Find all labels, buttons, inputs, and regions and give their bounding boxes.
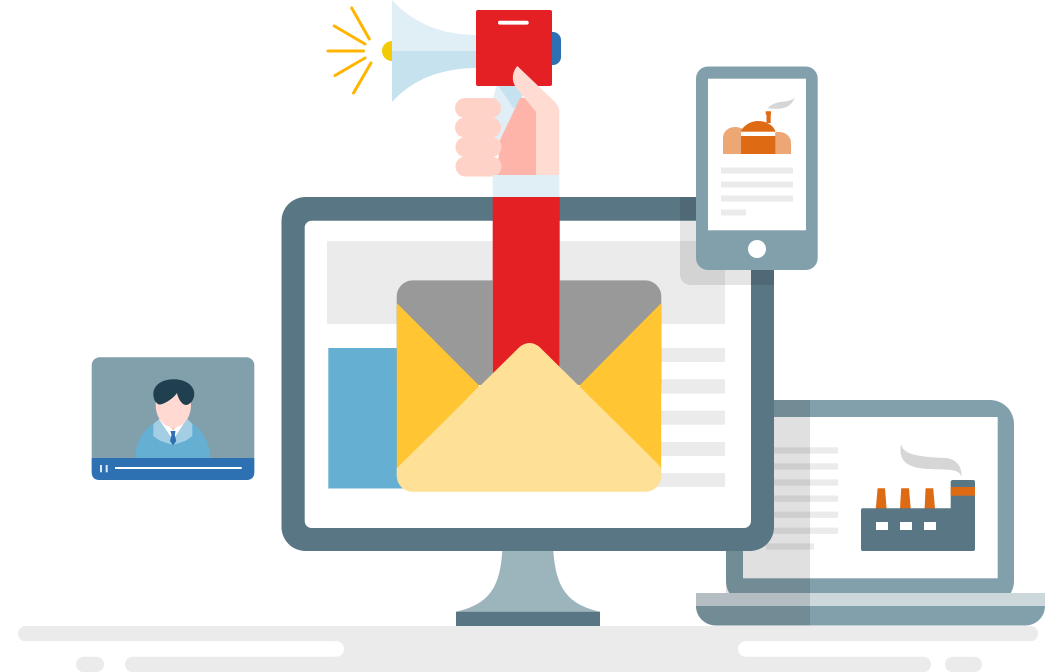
monitor cast shadow on laptop (696, 400, 810, 626)
icon: factory (861, 444, 975, 551)
icon: hand (455, 66, 559, 197)
phone home button (748, 240, 766, 258)
sound rays (328, 8, 371, 93)
ground shadow (0, 626, 1056, 672)
blue image block (328, 348, 408, 488)
megaphone handle (485, 84, 516, 142)
palm (497, 98, 536, 175)
shirt cuff (493, 175, 559, 197)
red arm sleeve (493, 197, 560, 387)
panel: monitor (282, 197, 774, 551)
megaphone bell (392, 0, 478, 51)
envelope side flaps (397, 303, 661, 470)
text lines (650, 348, 725, 487)
icon: megaphone (328, 0, 561, 142)
thumb and wrist (513, 66, 559, 175)
phone cast shadow (680, 197, 774, 285)
phone text lines (721, 168, 793, 216)
laptop text lines (760, 447, 838, 550)
presenter (135, 379, 210, 458)
icon: envelope (397, 280, 661, 492)
monitor screen (305, 221, 751, 528)
panel: laptop (696, 400, 1045, 626)
laptop lid (726, 400, 1014, 605)
video background (92, 357, 254, 480)
monitor frame (282, 197, 774, 551)
envelope back (397, 280, 661, 385)
laptop base (696, 593, 1045, 626)
panel: tablet phone (696, 66, 818, 270)
icon: refinery (723, 98, 794, 154)
white slot (498, 21, 529, 25)
video control bar (92, 458, 254, 480)
blue rear cap (550, 32, 561, 65)
monitor stand (456, 551, 600, 626)
phone screen (708, 79, 806, 230)
header block (327, 241, 725, 324)
phone body (696, 66, 818, 270)
megaphone red body (476, 10, 552, 86)
yellow end cap (382, 41, 392, 61)
panel: video player (92, 357, 254, 480)
envelope front flap (397, 343, 661, 492)
fingers (455, 98, 502, 176)
laptop screen (743, 417, 998, 578)
